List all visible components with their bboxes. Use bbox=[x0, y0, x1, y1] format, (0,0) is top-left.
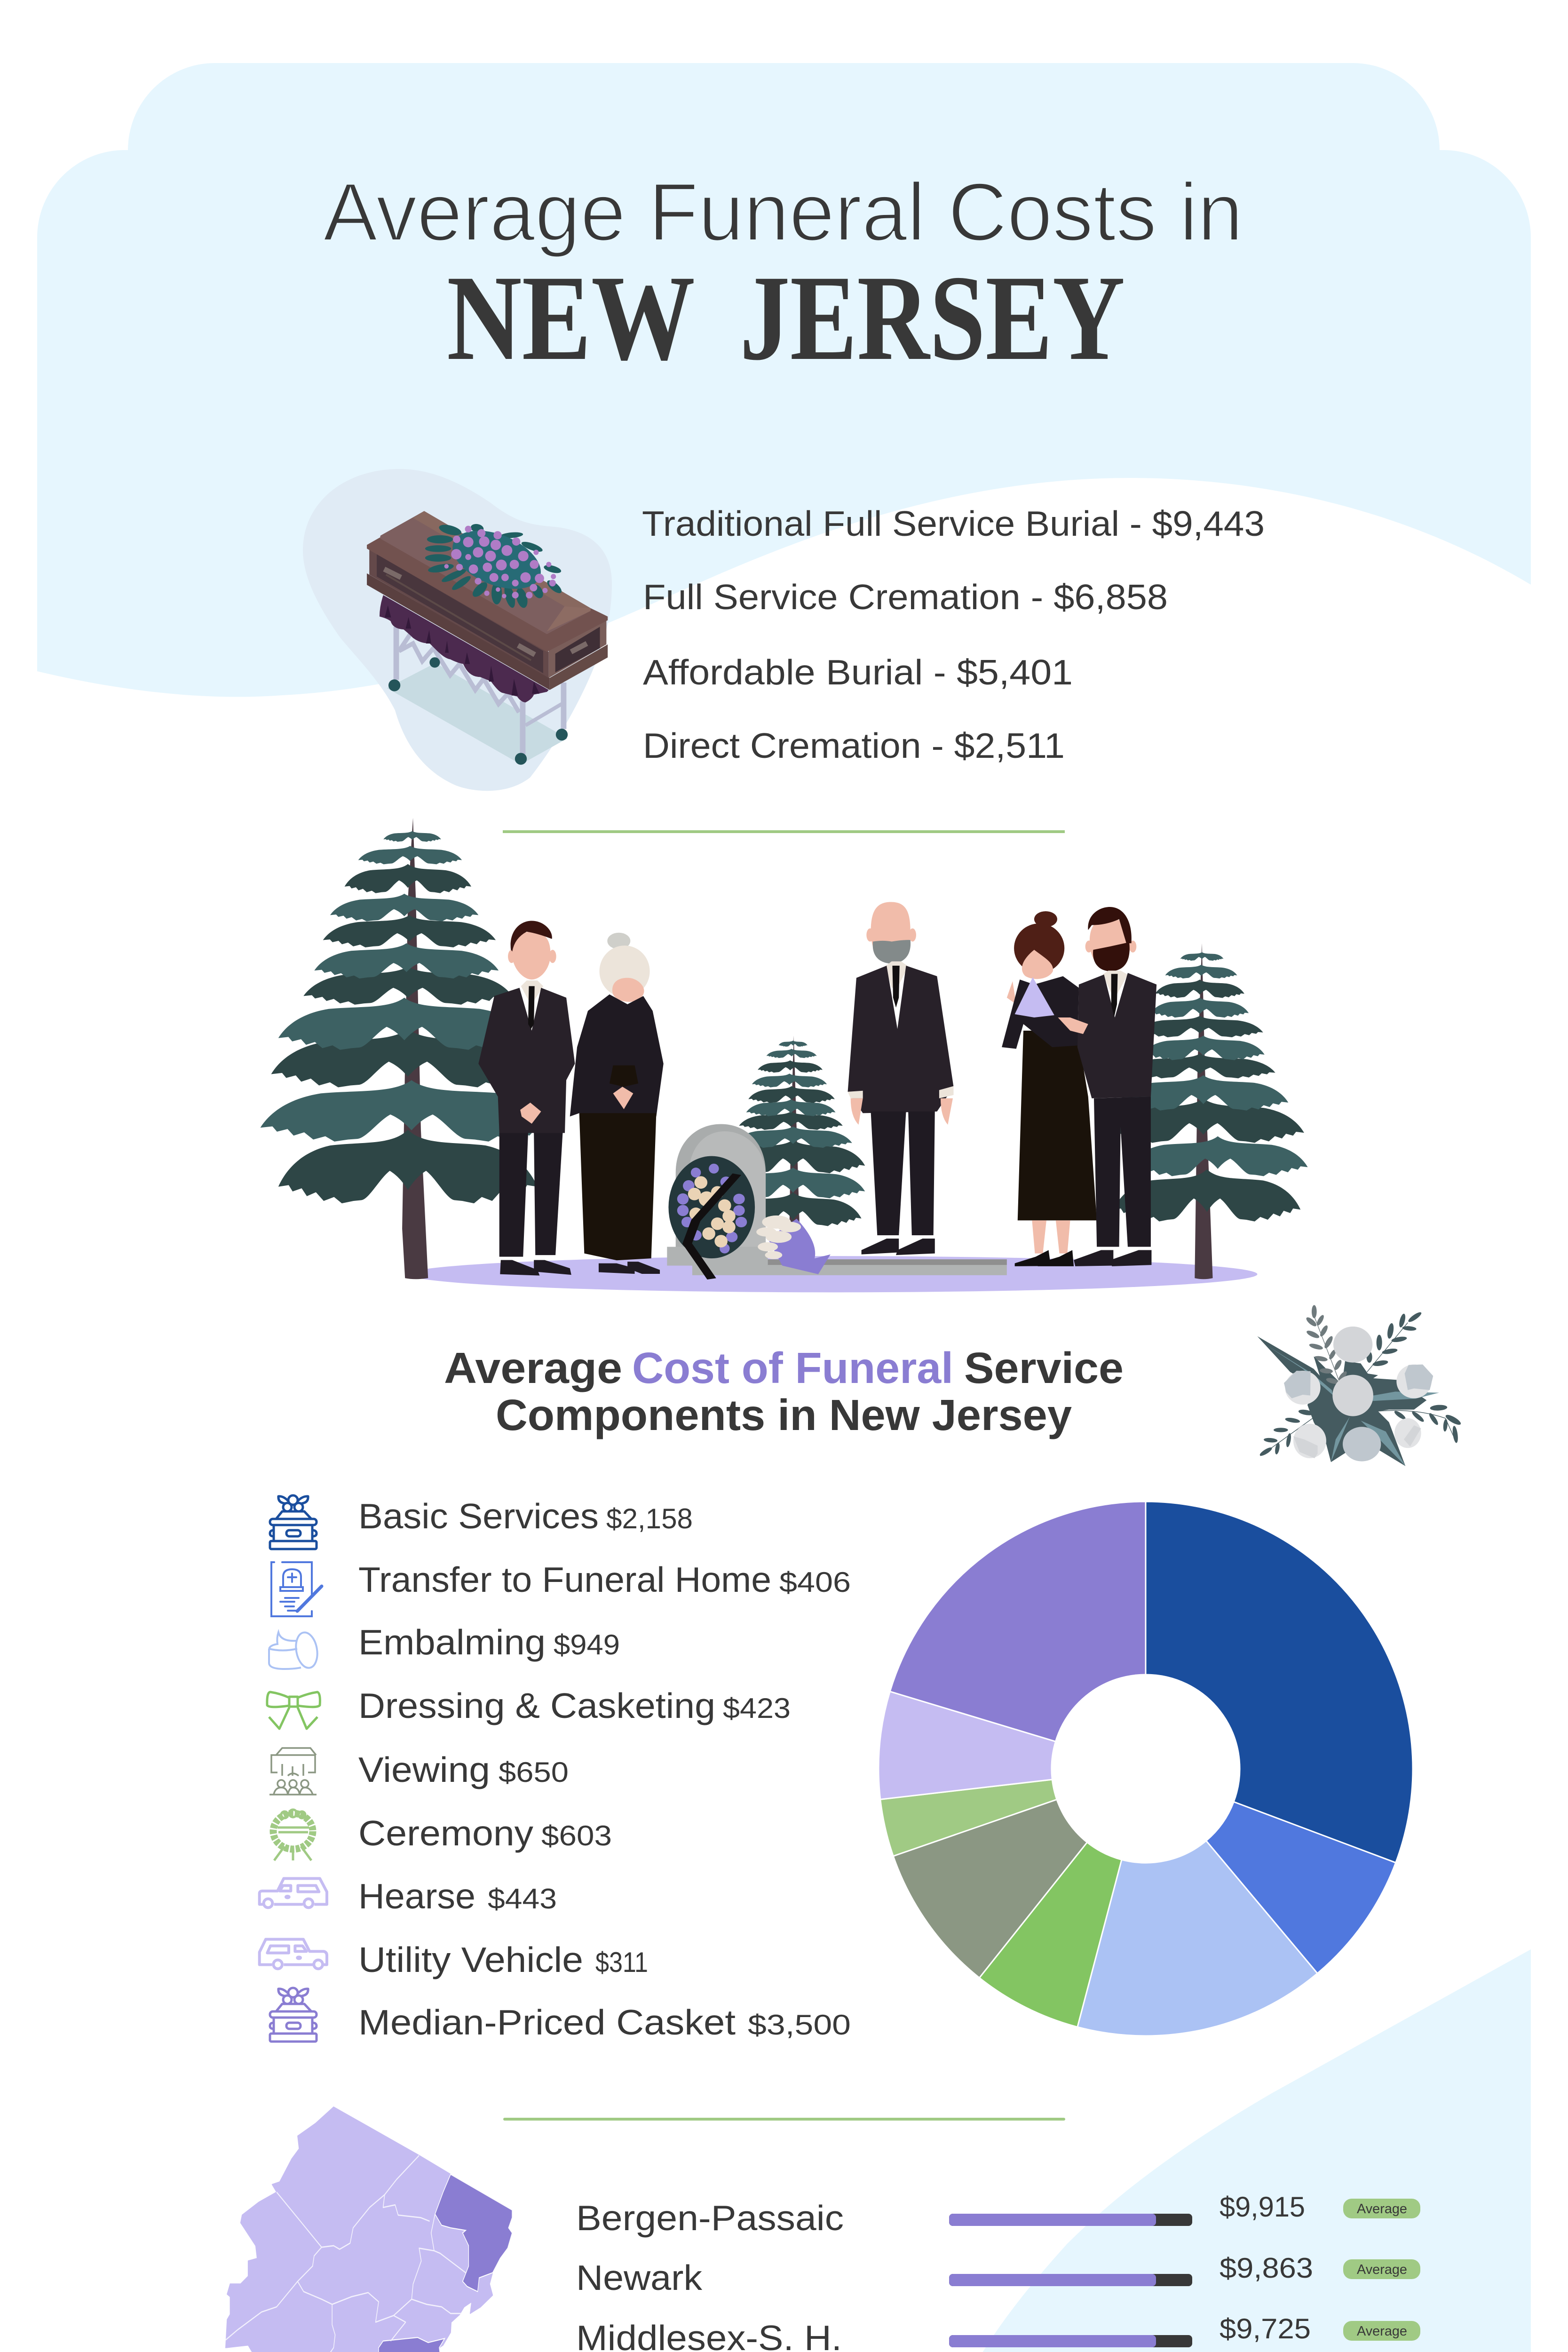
legend labels: $443 bbox=[488, 1883, 557, 1915]
title: JERSEY bbox=[740, 250, 1125, 386]
person: bearded man embracing bbox=[1058, 907, 1156, 1266]
legend labels: $650 bbox=[499, 1756, 569, 1788]
legend labels: Viewing bbox=[358, 1750, 490, 1789]
tree: right pine bbox=[1102, 943, 1308, 1279]
icon: viewing room bbox=[269, 1748, 317, 1795]
legend labels: $406 bbox=[779, 1566, 851, 1598]
heading: average cost of funeral service components bbox=[444, 1343, 1124, 1439]
title: NEW bbox=[447, 250, 695, 386]
map: New Jersey counties bbox=[146, 2107, 512, 2352]
icon: ribbon bow bbox=[267, 1692, 320, 1729]
row: Newark: Average bbox=[1357, 2262, 1407, 2277]
row: Bergen-Passaic: $9,915 bbox=[1220, 2191, 1305, 2223]
legend labels: Median-Priced Casket bbox=[358, 2002, 736, 2042]
icon: hearse bbox=[260, 1878, 327, 1907]
row: Bergen-Passaic bbox=[576, 2191, 1420, 2238]
legend: service components bbox=[260, 1495, 851, 2042]
county: Bergen bbox=[435, 2174, 512, 2292]
legend labels: Hearse bbox=[358, 1876, 475, 1916]
list: funeral types and costs: Traditional Full Service Burial - $9,443 bbox=[642, 504, 1265, 543]
legend labels: Embalming bbox=[358, 1622, 546, 1662]
illustration: mourners at a graveside among pine trees bbox=[261, 818, 1308, 1292]
list: funeral types and costs: Affordable Burial - $5,401 bbox=[643, 652, 1073, 692]
person: woman holding a tissue bbox=[1002, 911, 1097, 1266]
legend labels: Basic Services bbox=[358, 1496, 599, 1536]
row: Middlesex-S. H. bbox=[576, 2313, 1420, 2352]
icon: document with gravestone bbox=[271, 1562, 322, 1616]
tree: middle pine bbox=[721, 1036, 865, 1226]
person: man in suit, left bbox=[478, 921, 575, 1276]
heading: average cost of funeral service components: Cost of Funeral bbox=[632, 1343, 953, 1392]
row: Middlesex-S. H.: Average bbox=[1357, 2324, 1407, 2339]
gravestone with slab bbox=[667, 1124, 1007, 1275]
legend labels: $423 bbox=[723, 1692, 791, 1724]
legend labels: $949 bbox=[554, 1629, 620, 1661]
row: Bergen-Passaic: Bergen-Passaic bbox=[576, 2198, 844, 2238]
wreath with ribbon bbox=[668, 1156, 755, 1279]
legend labels: Transfer to Funeral Home bbox=[358, 1560, 771, 1599]
legend labels: Utility Vehicle bbox=[358, 1940, 583, 1979]
row: Newark: Newark bbox=[576, 2258, 703, 2297]
legend labels: Ceremony bbox=[358, 1813, 534, 1853]
list: funeral types and costs bbox=[642, 504, 1265, 765]
person: bald man with grey beard bbox=[848, 902, 954, 1255]
title: Average Funeral Costs in bbox=[323, 167, 1243, 258]
heading: average cost of funeral service components: Service bbox=[964, 1343, 1124, 1392]
icon: median-priced casket bbox=[270, 1988, 317, 2042]
county: Middlesex bbox=[355, 2337, 446, 2352]
legend labels bbox=[358, 1496, 851, 2042]
legend labels: Dressing & Casketing bbox=[358, 1686, 715, 1725]
list: funeral types and costs: Full Service Cremation - $6,858 bbox=[643, 577, 1168, 617]
bar chart: average cost by area bbox=[576, 2191, 1420, 2352]
list: funeral types and costs: Direct Cremation - $2,511 bbox=[643, 726, 1065, 765]
legend labels: $311 bbox=[595, 1947, 648, 1978]
row: Middlesex-S. H.: $9,725 bbox=[1220, 2313, 1311, 2344]
legend labels: $2,158 bbox=[606, 1503, 693, 1534]
icon: embalming cream jar bbox=[269, 1631, 320, 1669]
icon: ceremony wreath bbox=[273, 1810, 313, 1860]
icon: basic services casket bbox=[270, 1495, 317, 1549]
legend labels: $3,500 bbox=[748, 2009, 851, 2041]
legend labels: $603 bbox=[541, 1820, 612, 1851]
bouquet bbox=[756, 1216, 831, 1274]
icon: utility vehicle bbox=[260, 1939, 327, 1969]
title bbox=[323, 167, 1243, 386]
icon: casket on stand with blob bbox=[303, 469, 612, 791]
icon: flower bouquet bbox=[1257, 1305, 1462, 1466]
white wave band bbox=[37, 478, 1531, 2352]
donut chart bbox=[879, 1502, 1413, 2036]
heading: average cost of funeral service components: Components in New Jersey bbox=[496, 1391, 1072, 1439]
row: Newark bbox=[576, 2252, 1420, 2297]
tree: left pine bbox=[261, 818, 562, 1279]
person: older woman bbox=[570, 933, 664, 1274]
row: Bergen-Passaic: Average bbox=[1357, 2201, 1407, 2217]
row: Newark: $9,863 bbox=[1220, 2252, 1313, 2284]
heading: average cost of funeral service components: Average bbox=[444, 1343, 622, 1392]
